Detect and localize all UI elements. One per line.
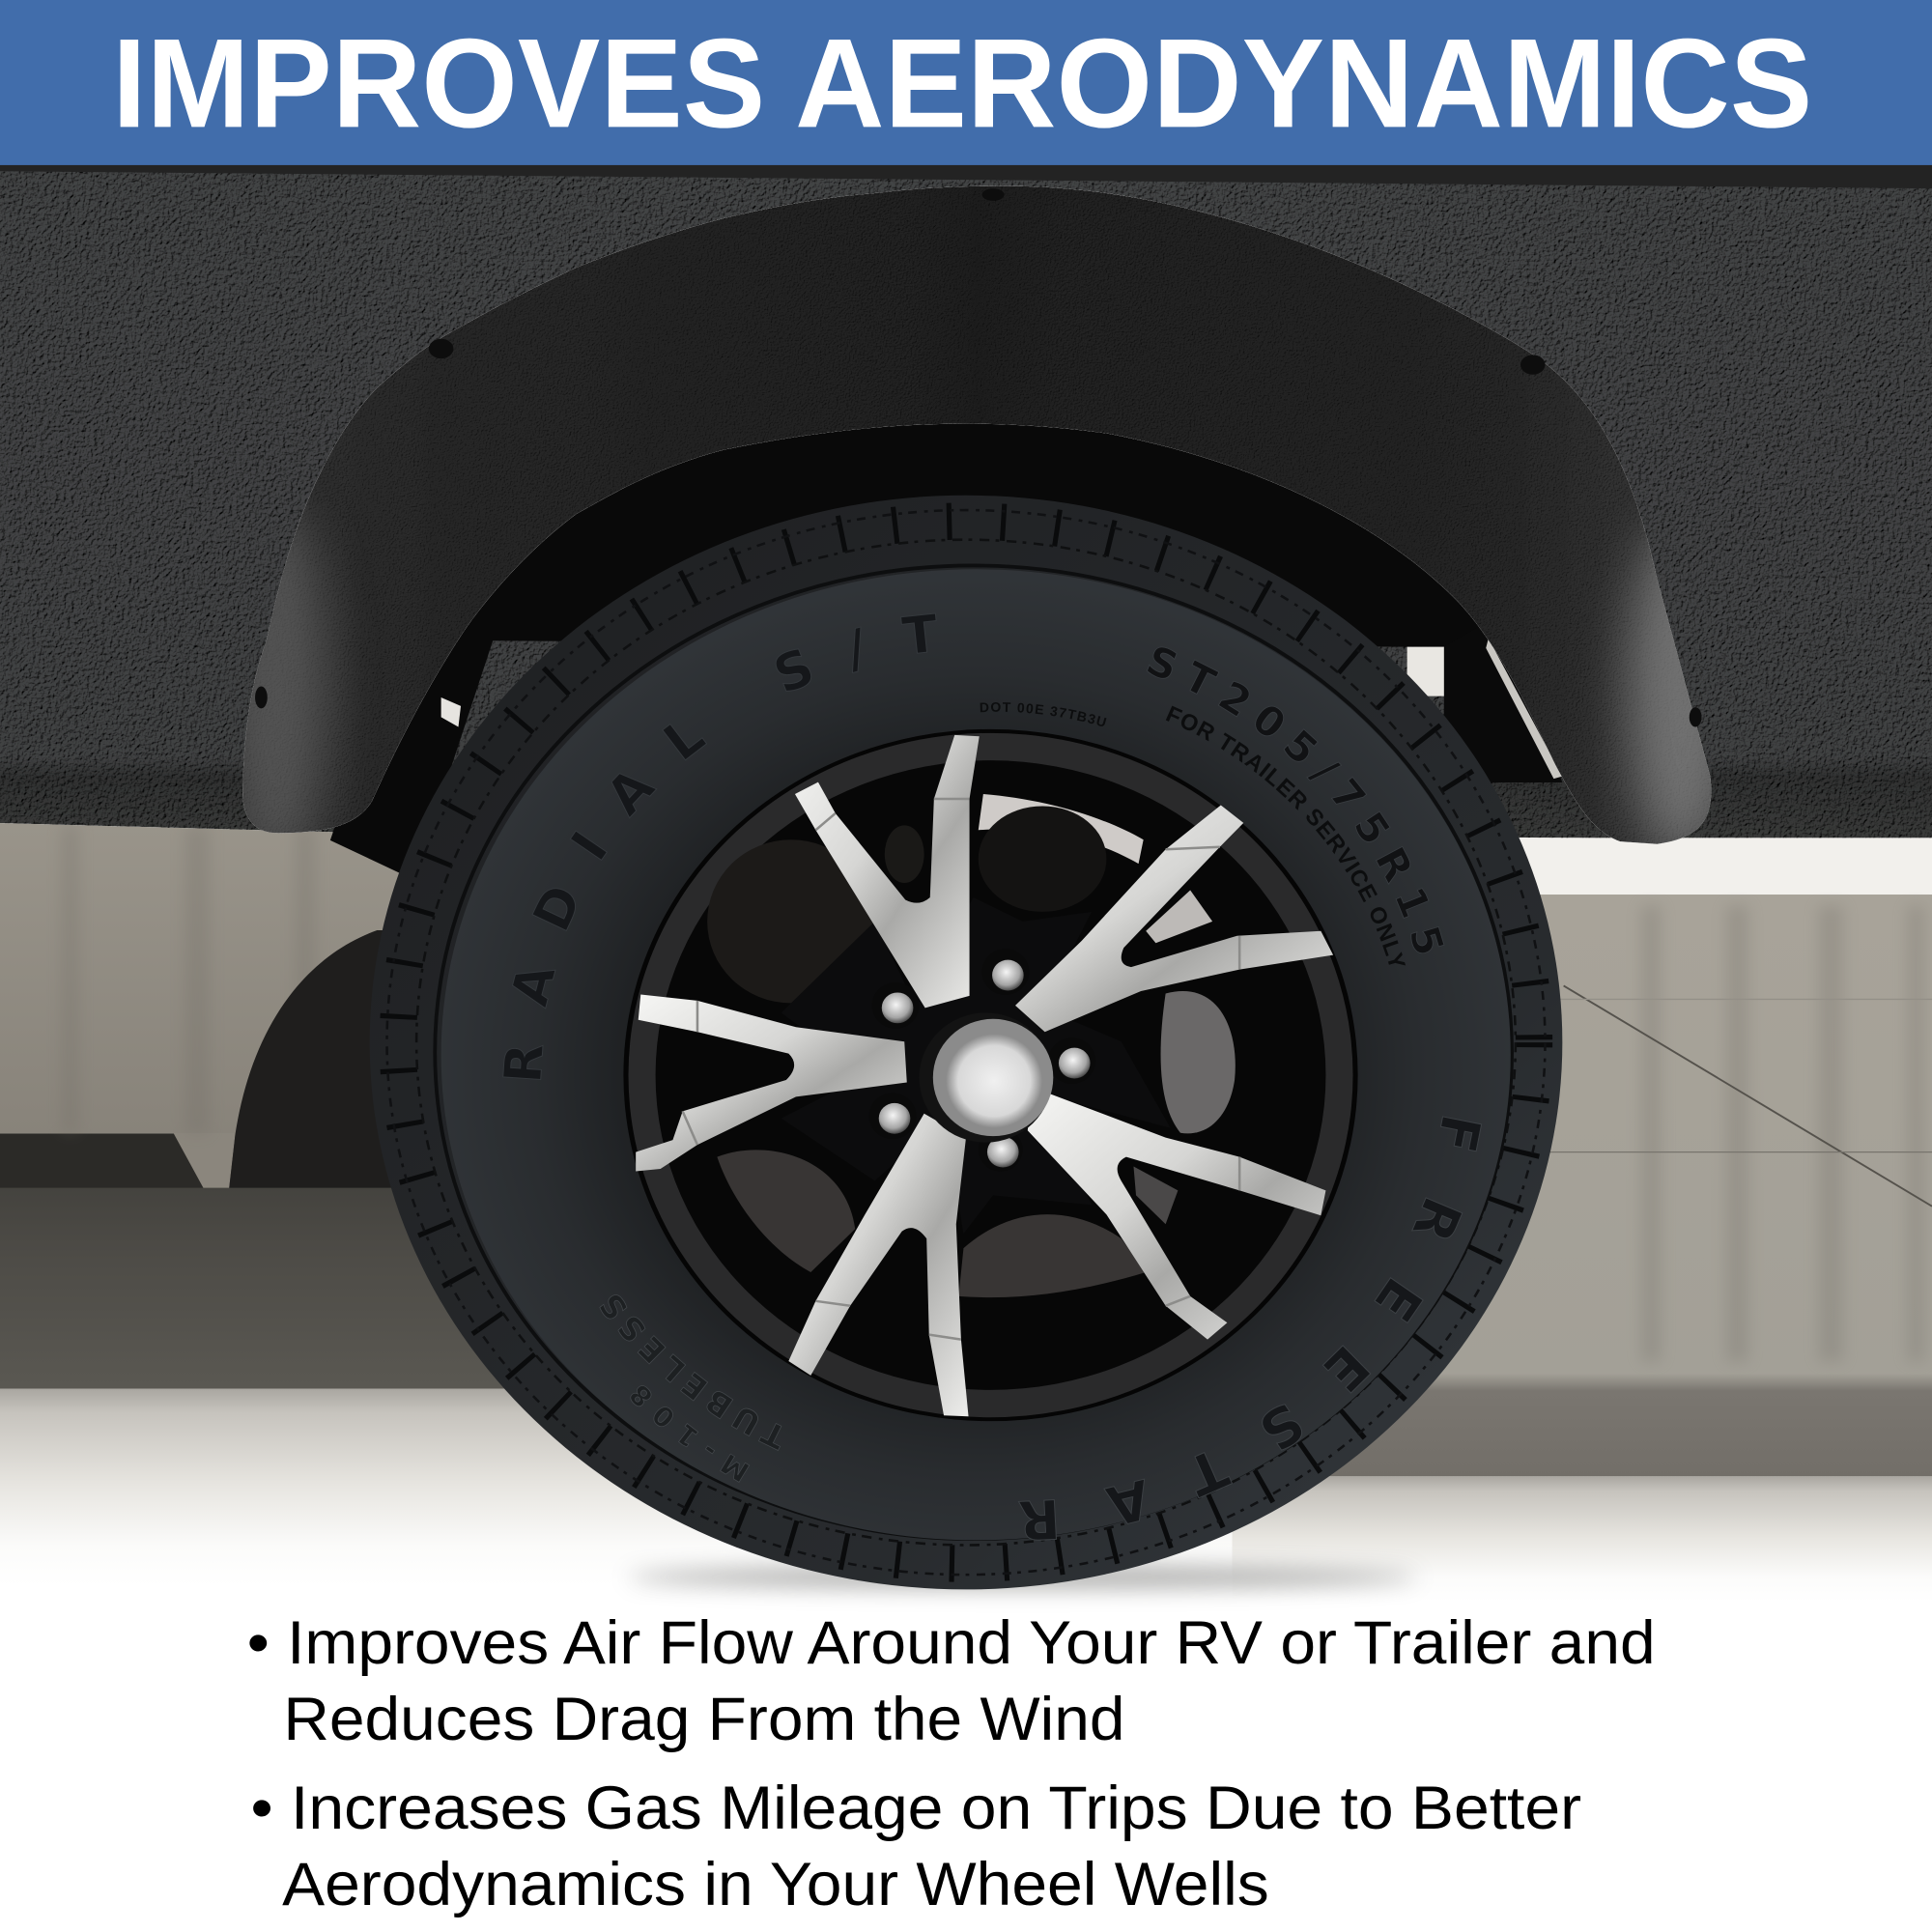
left floor band	[0, 1133, 567, 1389]
spoke pair top	[795, 735, 980, 1008]
sidewall size ST205/75R15: ST205/75R15	[1147, 647, 1445, 953]
spoke chamfer lines	[683, 799, 1239, 1340]
sidewall brand RADIAL S/T: RADIAL S/T	[502, 614, 935, 1080]
title: IMPROVES AERODYNAMICS	[112, 12, 1812, 154]
suspension and frame	[441, 616, 1562, 782]
left wall	[0, 823, 518, 1133]
trailer body panel	[0, 160, 1932, 838]
header banner	[0, 0, 1932, 165]
bullet 2 line 2: Aerodynamics in Your Wheel Wells	[282, 1851, 1269, 1918]
sidewall brand FREESTAR: FREESTAR	[1018, 1117, 1482, 1541]
right floor fade	[1233, 1476, 1932, 1602]
sidewall TUBELESS: TUBELESS	[599, 1294, 782, 1451]
left dark reflection	[0, 1133, 203, 1188]
rim barrel	[623, 729, 1358, 1421]
contact shadow	[629, 1566, 1417, 1588]
wheel rim	[623, 729, 1358, 1421]
left wall gap	[174, 1133, 236, 1188]
sidewall	[441, 569, 1511, 1540]
background floor and wall	[0, 813, 1932, 1932]
wheel shadow on wall	[229, 930, 419, 1188]
lug nuts	[868, 949, 1095, 1171]
spoke pair bottom	[788, 1114, 969, 1416]
hub star	[781, 897, 1171, 1234]
right bright strip	[1233, 833, 1932, 897]
spokes	[636, 735, 1333, 1416]
tread pattern	[398, 522, 1534, 1564]
bullet 2 line 1: • Increases Gas Mileage on Trips Due to Better	[251, 1775, 1581, 1842]
bullet 1 line 1: • Improves Air Flow Around Your RV or Trailer and	[247, 1609, 1656, 1677]
tread	[370, 496, 1562, 1589]
floor lower fade	[0, 1389, 1233, 1586]
sidewall M-108: M-108	[630, 1385, 750, 1483]
wheel well	[330, 370, 1560, 880]
spoke pair upper right	[1015, 805, 1333, 1032]
bullet 1 line 2: Reduces Drag From the Wind	[283, 1686, 1125, 1753]
bullet list	[247, 1609, 1656, 1918]
right wall and floor	[1233, 895, 1932, 1479]
top trim strip	[0, 160, 1932, 188]
spoke pair left	[636, 994, 907, 1171]
fender flare	[225, 186, 1737, 875]
sidewall for trailer service only: FOR TRAILER SERVICE ONLY	[1166, 705, 1406, 966]
tire	[370, 495, 1563, 1590]
sidewall DOT code: DOT 00E 37TB3U	[980, 702, 1107, 726]
spoke pair lower right	[1028, 1087, 1325, 1340]
openings showing backdrop	[707, 794, 1236, 1297]
hub cap	[920, 1012, 1053, 1143]
